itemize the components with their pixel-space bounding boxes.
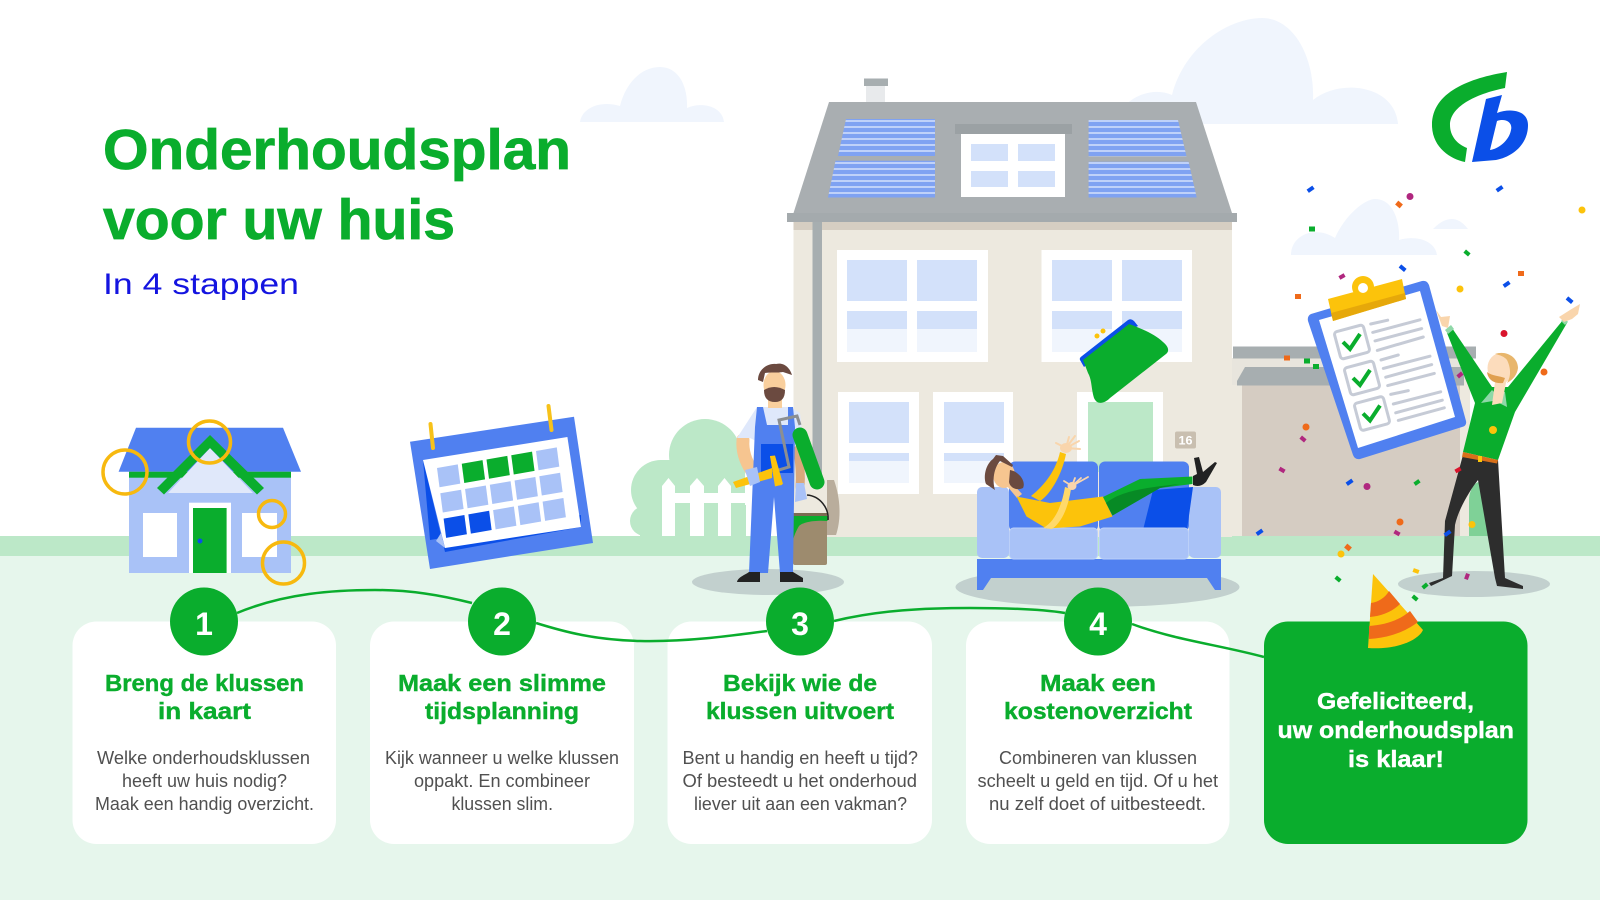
hands xyxy=(1056,436,1088,490)
step number 3: 3 xyxy=(791,606,809,642)
worker xyxy=(692,364,844,595)
house number xyxy=(1175,432,1196,448)
yellow inspection rings xyxy=(103,421,304,584)
front door xyxy=(1077,392,1163,472)
yellow tool xyxy=(733,456,783,488)
head xyxy=(985,455,1024,490)
main house xyxy=(787,78,1237,537)
upper left window xyxy=(837,250,988,362)
heading: step 4 xyxy=(1004,670,1192,724)
cuffs xyxy=(1445,318,1568,334)
small house icon xyxy=(103,421,304,584)
clip xyxy=(1328,276,1406,321)
calendar grid xyxy=(437,447,566,538)
arms xyxy=(743,440,752,471)
calendar rings xyxy=(430,406,552,448)
clipboard xyxy=(1308,276,1466,459)
sweater xyxy=(1447,320,1567,460)
panel: step 4 xyxy=(966,622,1230,844)
text: step 3: Bent u handig en heeft u tijd? xyxy=(682,748,918,768)
step number 2 xyxy=(468,588,536,656)
roller frame xyxy=(772,416,800,472)
text: step 2: Kijk wanneer u welke klussen xyxy=(385,748,619,768)
dormer window xyxy=(955,124,1072,197)
chimney xyxy=(864,78,888,102)
calendar icon xyxy=(410,406,593,569)
step number 4 xyxy=(1064,588,1132,656)
text: step 1: Welke onderhoudsklussen xyxy=(97,748,310,768)
neck xyxy=(1007,483,1022,498)
raised arm xyxy=(1031,452,1066,501)
panel: step 2 xyxy=(370,622,634,844)
logo xyxy=(1432,72,1528,162)
neck and face xyxy=(758,364,792,408)
overalls xyxy=(749,407,795,573)
congratulations text: Gefeliciteerd, xyxy=(1317,688,1474,714)
text: step 3: liever uit aan een vakman? xyxy=(694,794,907,814)
heading: step 4: kostenoverzicht xyxy=(1004,698,1192,724)
reclining man xyxy=(985,436,1217,529)
sofa xyxy=(956,462,1240,607)
head, collar and hands xyxy=(1436,304,1580,407)
text: step 4: scheelt u geld en tijd. Of u het xyxy=(978,771,1218,791)
heading: step 1: in kaart xyxy=(158,698,251,724)
list lines xyxy=(1371,320,1444,420)
panel: step 3 xyxy=(668,622,932,844)
title: voor uw huis xyxy=(103,188,455,252)
legs xyxy=(1103,476,1192,516)
downpipe xyxy=(812,222,822,482)
text: step 3 xyxy=(682,748,918,814)
step number 1 xyxy=(170,588,238,656)
step number 4: 4 xyxy=(1089,606,1107,642)
shoes xyxy=(1193,457,1217,486)
rain barrel xyxy=(827,480,840,535)
torso xyxy=(1016,496,1112,528)
text: step 2 xyxy=(385,748,619,814)
paint bucket xyxy=(793,495,828,565)
annex building xyxy=(1232,346,1490,536)
heading: step 2: tijdsplanning xyxy=(425,698,579,724)
step number 2: 2 xyxy=(493,606,511,642)
step number 1: 1 xyxy=(195,606,213,642)
heading: step 3: klussen uitvoert xyxy=(706,698,894,724)
heading: step 2: Maak een slimme xyxy=(398,670,606,696)
checkboxes xyxy=(1334,325,1390,431)
title xyxy=(103,118,571,252)
text: step 2: klussen slim. xyxy=(452,794,553,814)
text: step 3: Of besteedt u het onderhoud xyxy=(682,771,917,791)
upper right window xyxy=(1042,250,1192,362)
shirt xyxy=(737,407,802,470)
panel: step 1 xyxy=(72,622,336,844)
green roller xyxy=(800,435,817,482)
congratulations text xyxy=(1278,688,1514,772)
bushes and fence xyxy=(630,419,756,537)
text: step 1: heeft uw huis nodig? xyxy=(122,771,287,791)
heading: step 2 xyxy=(398,670,606,724)
celebrating man xyxy=(1398,304,1580,597)
congratulations text: uw onderhoudsplan xyxy=(1278,717,1514,743)
text: step 4: nu zelf doet of uitbesteedt. xyxy=(989,794,1206,814)
heading: step 1 xyxy=(105,670,304,724)
text: step 1: Maak een handig overzicht. xyxy=(95,794,314,814)
heading: step 1: Breng de klussen xyxy=(105,670,304,696)
congratulations text: is klaar! xyxy=(1348,746,1444,772)
text: step 4 xyxy=(978,748,1218,814)
title: Onderhoudsplan xyxy=(103,118,571,182)
shoes xyxy=(737,572,803,582)
heading: step 4: Maak een xyxy=(1040,670,1156,696)
party hat xyxy=(1368,574,1423,648)
clouds xyxy=(580,18,1468,255)
solar panels xyxy=(828,119,1197,198)
text: step 2: oppakt. En combineer xyxy=(414,771,590,791)
trousers xyxy=(1429,455,1523,589)
roof xyxy=(794,102,1232,213)
heading: step 3: Bekijk wie de xyxy=(723,670,877,696)
lower left window xyxy=(838,392,919,494)
lower middle window xyxy=(933,392,1013,494)
belt xyxy=(1462,452,1498,464)
heading: step 3 xyxy=(706,670,894,724)
lower arm xyxy=(1043,487,1071,529)
step number 3 xyxy=(766,588,834,656)
panel: congratulations xyxy=(1264,622,1528,844)
subtitle: In 4 stappen xyxy=(103,268,299,301)
falling wallet xyxy=(1080,319,1168,403)
text: step 4: Combineren van klussen xyxy=(999,748,1197,768)
confetti xyxy=(1256,185,1586,601)
text: step 1 xyxy=(95,748,314,814)
facade xyxy=(794,222,1232,537)
connecting line xyxy=(237,590,1264,657)
ground xyxy=(0,536,1600,900)
gloves xyxy=(745,467,807,502)
house number: 16 xyxy=(1178,434,1193,448)
